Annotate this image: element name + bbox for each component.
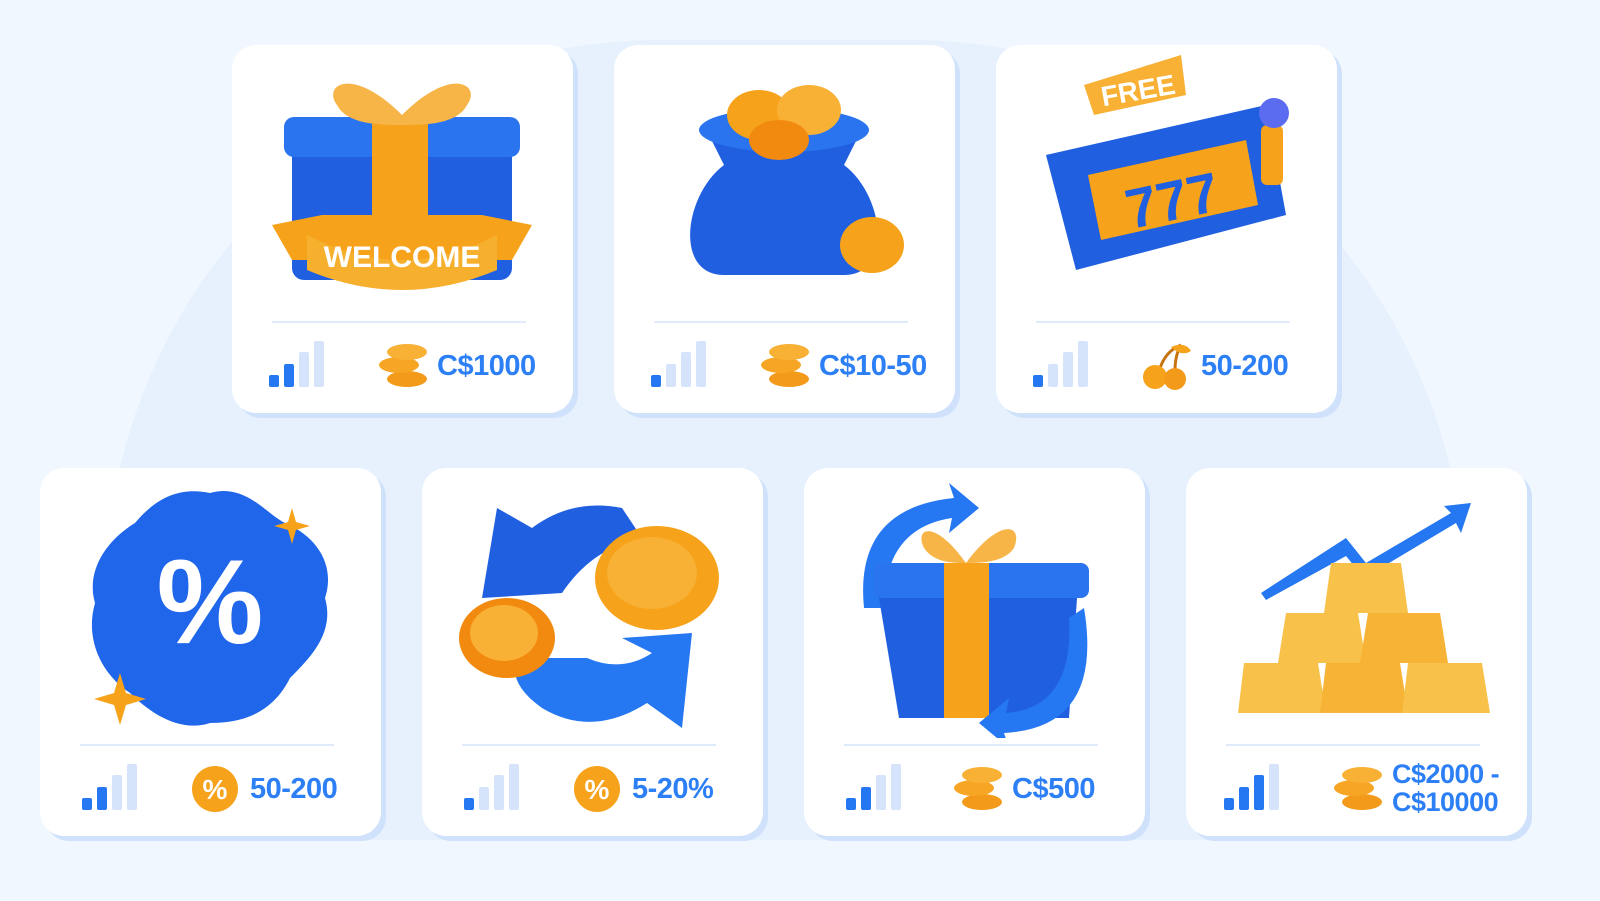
icon: percent badge: %	[157, 535, 263, 669]
icon: slot machine with free tag: 777	[1120, 160, 1224, 241]
value: 50-200	[1201, 350, 1288, 382]
value: C$10000	[1392, 787, 1498, 817]
value: C$10-50	[819, 350, 927, 382]
value: C$500	[1012, 773, 1095, 805]
signal: level 2	[82, 764, 137, 810]
value: 5-20%	[632, 773, 713, 805]
icon: percent badge small	[192, 766, 238, 812]
signal: level 1	[464, 764, 519, 810]
card: percentage bonus	[40, 468, 381, 836]
icon: gift with circular arrows	[863, 483, 1089, 738]
value	[1392, 759, 1499, 817]
signal: level 1	[1033, 341, 1088, 387]
icon: cherries	[1143, 344, 1191, 390]
icon: coins	[954, 767, 1002, 810]
signal: level 1	[651, 341, 706, 387]
card: reload bonus	[804, 468, 1145, 836]
icon: percent badge	[92, 491, 328, 726]
icon: percent badge small	[574, 766, 620, 812]
value: 50-200	[250, 773, 337, 805]
icon: welcome gift box	[272, 84, 532, 290]
icon: slot machine with free tag	[1046, 55, 1289, 270]
icon: cashback arrows with coins	[459, 506, 719, 728]
icon: coins	[1334, 767, 1382, 810]
signal: level 2	[846, 764, 901, 810]
icon: gold bars with rising arrow	[1238, 503, 1490, 713]
icon: slot machine with free tag: FREE	[1099, 69, 1178, 112]
card: high roller	[1186, 468, 1527, 836]
card: coin bag	[614, 45, 955, 413]
value: C$2000 -	[1392, 759, 1499, 789]
signal: level 2	[269, 341, 324, 387]
card: free spins	[996, 45, 1337, 413]
icon: welcome gift box: WELCOME	[324, 241, 480, 274]
card: welcome bonus	[232, 45, 573, 413]
value: C$1000	[437, 350, 536, 382]
signal: level 3	[1224, 764, 1279, 810]
card: cashback	[422, 468, 763, 836]
icon: coins	[379, 344, 427, 387]
icon: percent badge small: %	[585, 774, 610, 805]
icon: bag of coins	[690, 85, 904, 275]
icon: coins	[761, 344, 809, 387]
icon: percent badge small: %	[203, 774, 228, 805]
